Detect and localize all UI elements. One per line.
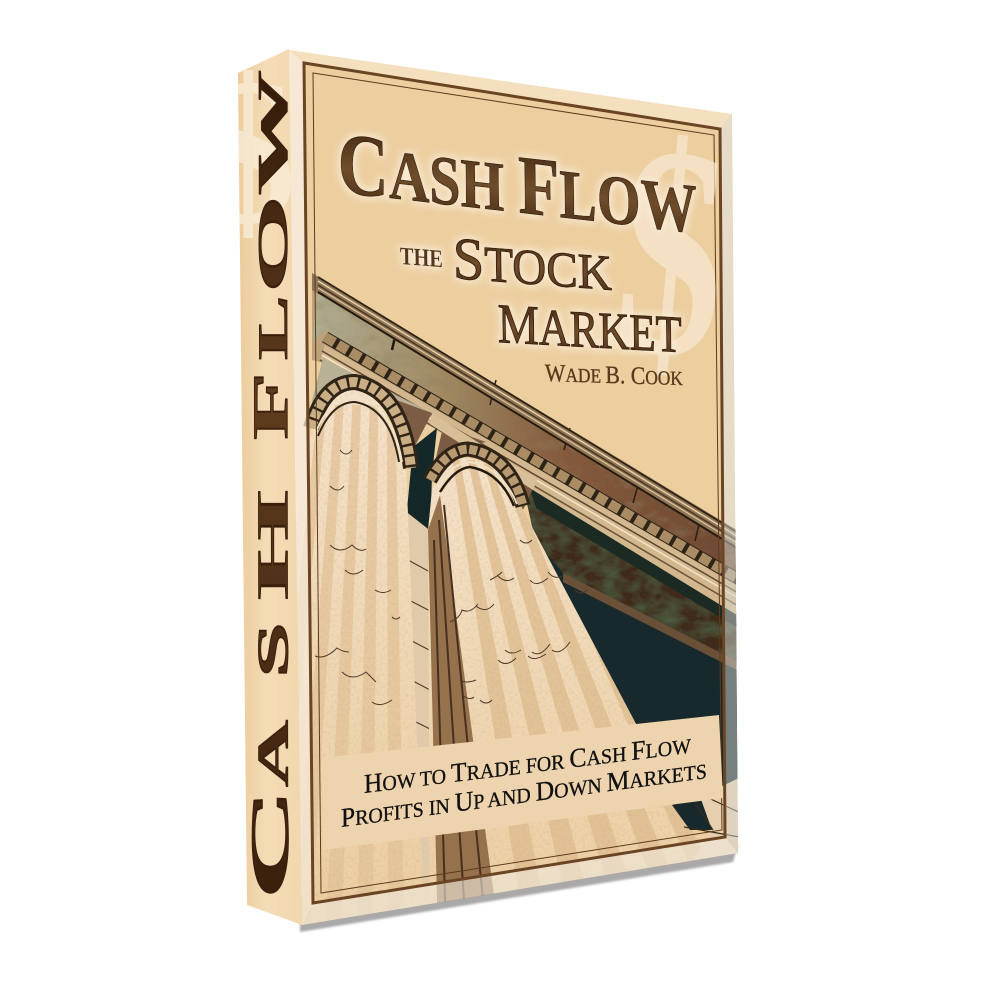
- washed-out bottom margin: [302, 837, 738, 925]
- washed-out left margin: [289, 50, 313, 925]
- recessed stone wall: [408, 513, 430, 905]
- cover photograph: temple columns: [296, 273, 738, 925]
- second moulding: [430, 413, 537, 490]
- left column shaft: [296, 390, 423, 925]
- cornice lines: [312, 273, 745, 553]
- front cover base: [289, 50, 738, 925]
- frieze stone: [312, 290, 745, 577]
- title: the stock: THE: [400, 243, 443, 273]
- title: the stock: STOCK: [452, 224, 612, 303]
- wall shadow strip: [530, 488, 745, 632]
- shadowed wall: [527, 492, 736, 660]
- book shadow: [300, 845, 738, 932]
- stone step lower right: [692, 778, 738, 860]
- brown soffit left: [398, 400, 432, 445]
- brown soffit centre: [436, 432, 486, 458]
- subtitle banner: [322, 715, 723, 850]
- moulding: [320, 345, 745, 620]
- outer frame line: [304, 63, 725, 903]
- book cover illustration: [238, 49, 739, 933]
- spine title: O: [251, 195, 297, 293]
- spine title: L: [251, 295, 297, 360]
- shadow between columns: [408, 428, 437, 529]
- spine title: S: [249, 622, 298, 678]
- title: market: MARKET: [497, 293, 682, 365]
- soffit under entablature: [312, 358, 432, 414]
- right column capital: [430, 449, 523, 506]
- cover panel background: [304, 63, 725, 903]
- brown soffit right: [522, 478, 537, 510]
- dentil band: [325, 337, 745, 583]
- spine title: H: [248, 490, 297, 600]
- dark sky: [545, 552, 738, 816]
- spine title: F: [242, 372, 298, 440]
- lower ledge: [563, 573, 745, 674]
- spine dollar sign: $: [199, 35, 297, 268]
- spine title: W: [251, 70, 297, 195]
- spine title: A: [249, 720, 298, 787]
- author: WADE B. COOK: [545, 360, 684, 391]
- subtitle line 1: HOW TO TRADE FOR CASH FLOW: [364, 729, 691, 799]
- column scallop marks: [315, 450, 587, 705]
- right column shaft: [428, 458, 701, 904]
- washed-out right margin: [720, 114, 738, 853]
- inner frame line: [313, 73, 722, 893]
- front dollar sign: $: [605, 80, 739, 423]
- title: cash flow: CASH FLOW: [337, 114, 697, 253]
- dark corner below banner: [672, 800, 712, 830]
- spine title: C: [240, 787, 300, 900]
- left column capital: [311, 382, 411, 468]
- subtitle line 2: PROFITS IN UP AND DOWN MARKETS: [341, 754, 707, 833]
- entablature: [312, 273, 745, 620]
- book spine: [238, 49, 302, 925]
